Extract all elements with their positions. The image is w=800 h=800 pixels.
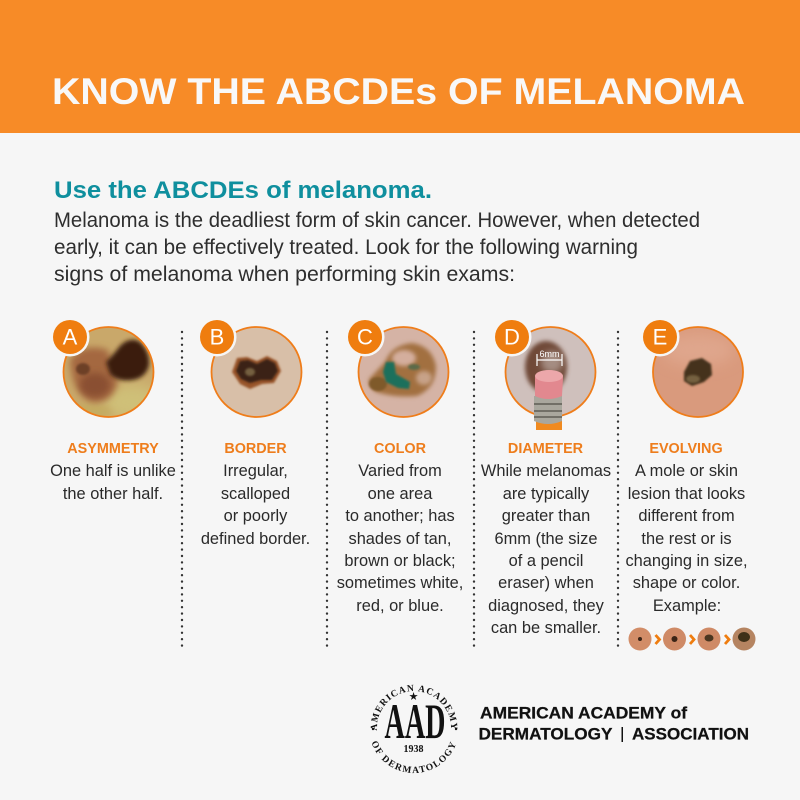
description: of a pencil [509,552,583,570]
description [481,462,611,637]
badge B: B [210,324,224,350]
badge C: C [357,324,373,350]
badge B [198,318,236,356]
description: changing in size, [625,552,748,570]
year: 1938 [404,744,424,755]
description: red, or blue. [356,597,444,615]
intro text block: signs of melanoma when performing skin exams: [54,263,515,286]
pencil [534,370,563,430]
image: asymmetric lesion [62,326,154,418]
description: shades of tan, [349,530,451,548]
heading: EVOLVING [649,441,723,457]
description: eraser) when [498,574,594,592]
description: shape or color. [633,574,740,592]
panel: asymmetry [50,318,176,503]
panel: border [198,318,310,548]
intro text block [54,209,700,286]
description: While melanomas [481,462,611,480]
intro text block: early, it can be effectively treated. Look for the following warning [54,236,638,259]
description: brown or black; [344,552,456,570]
intro text block: Melanoma is the deadliest form of skin cancer. However, when detected [54,209,700,232]
badge E: E [653,324,667,350]
description: 6mm (the size [495,530,597,548]
description: One half is unlike [50,462,176,480]
image: irregular border lesion [210,326,302,418]
description: sometimes white, [337,574,463,592]
description: Irregular, [223,462,288,480]
panel: color [337,318,463,615]
badge A: A [63,324,78,350]
description [625,462,748,615]
heading: ASYMMETRY [67,441,159,457]
image: multi-colored lesion [358,326,450,418]
description: lesion that looks [628,485,745,503]
description: Example: [653,597,721,615]
intro heading: Use the ABCDEs of melanoma. [54,177,432,204]
description: different from [638,507,735,525]
title: KNOW THE ABCDEs OF MELANOMA [52,71,745,112]
description [50,462,176,503]
description: or poorly [224,507,288,525]
badge E [640,318,680,356]
heading: DIAMETER [508,441,584,457]
panel: diameter [481,318,611,637]
description [337,462,463,615]
header banner [0,0,800,133]
description: diagnosed, they [488,597,605,615]
badge A [50,318,90,356]
description: the other half. [63,485,163,503]
seal ring text [370,684,458,774]
image: evolving lesion [652,326,744,418]
description: defined border. [201,530,310,548]
description: greater than [502,507,590,525]
evolution sequence [628,628,756,650]
description: to another; has [345,507,455,525]
description: one area [368,485,433,503]
description [201,462,310,548]
organization name: DERMATOLOGY [478,724,613,744]
description: scalloped [221,485,290,503]
heading: COLOR [374,441,427,457]
description: A mole or skin [635,462,738,480]
seal ring text: AMERICAN ACADEMY [370,684,458,731]
star: ★ [409,691,419,703]
badge C [346,318,384,356]
seal ring text: OF DERMATOLOGY [372,741,456,774]
AAD seal logo [370,684,458,774]
image: lesion with pencil eraser [500,324,600,430]
badge D [492,318,532,356]
panel: evolving [625,318,756,650]
organization name [478,704,749,744]
description: can be smaller. [491,619,601,637]
6mm scale: 6mm [540,349,560,359]
description: the rest or is [641,530,732,548]
badge D: D [504,324,520,350]
heading: BORDER [224,441,287,457]
description: Varied from [358,462,442,480]
AAD letters: AAD [384,693,446,749]
description: are typically [503,485,590,503]
organization name: ASSOCIATION [632,724,749,744]
organization name: AMERICAN ACADEMY of [480,704,687,722]
